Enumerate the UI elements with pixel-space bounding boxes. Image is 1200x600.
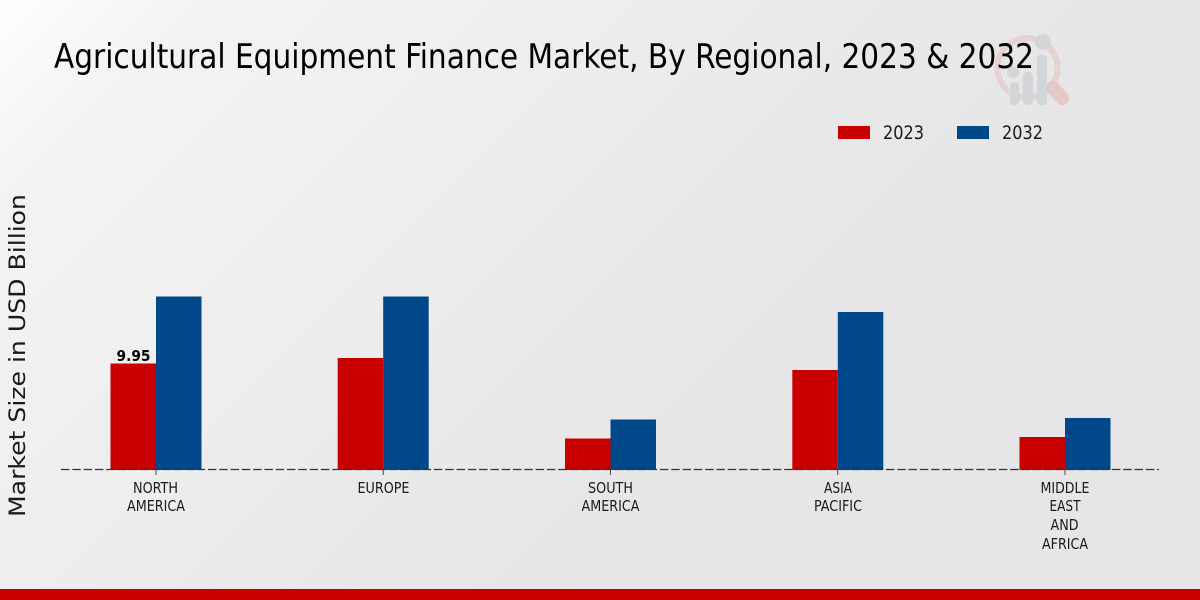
label: Asia Pacific bbox=[814, 479, 862, 515]
label: Middle East and Africa: EAST bbox=[1050, 497, 1081, 515]
footer bar bbox=[0, 589, 1200, 600]
label: North America: NORTH bbox=[133, 479, 178, 497]
label: Asia Pacific: PACIFIC bbox=[814, 497, 862, 515]
bars: Asia Pacific bbox=[792, 312, 883, 470]
label: South America: SOUTH bbox=[588, 479, 633, 497]
value label: 9.95: 9.95 bbox=[116, 347, 150, 365]
x tick marks bbox=[156, 470, 1065, 475]
bars: Europe bbox=[338, 296, 429, 470]
label: Asia Pacific: ASIA bbox=[824, 479, 853, 497]
bars: South America bbox=[565, 420, 656, 470]
label: South America bbox=[582, 479, 640, 515]
x axis baseline bbox=[61, 468, 1159, 470]
y axis label: Market Size in USD Billion bbox=[5, 194, 31, 517]
legend bbox=[838, 122, 1043, 144]
bars: Middle East and Africa bbox=[1020, 418, 1110, 470]
legend item: 2032: 2032 bbox=[1002, 122, 1043, 144]
label: South America: AMERICA bbox=[582, 497, 640, 515]
legend item: 2023: 2023 bbox=[883, 122, 924, 144]
label: Europe: EUROPE bbox=[358, 479, 410, 497]
label: Middle East and Africa: AND bbox=[1050, 516, 1078, 534]
label: Middle East and Africa bbox=[1040, 479, 1090, 553]
title: Agricultural Equipment Finance Market, By Regional, 2023 & 2032 bbox=[54, 37, 1034, 77]
x axis labels bbox=[127, 479, 1090, 553]
label: North America bbox=[127, 479, 186, 515]
label: Middle East and Africa: AFRICA bbox=[1042, 535, 1089, 553]
legend item: 2023 bbox=[838, 122, 924, 144]
label: North America: AMERICA bbox=[127, 497, 186, 515]
legend item: 2032 bbox=[957, 122, 1043, 144]
label: Middle East and Africa: MIDDLE bbox=[1040, 479, 1090, 497]
bars: North America bbox=[110, 296, 202, 470]
bar chart bbox=[61, 296, 1159, 475]
icon: watermark magnifier logo bbox=[998, 34, 1062, 105]
